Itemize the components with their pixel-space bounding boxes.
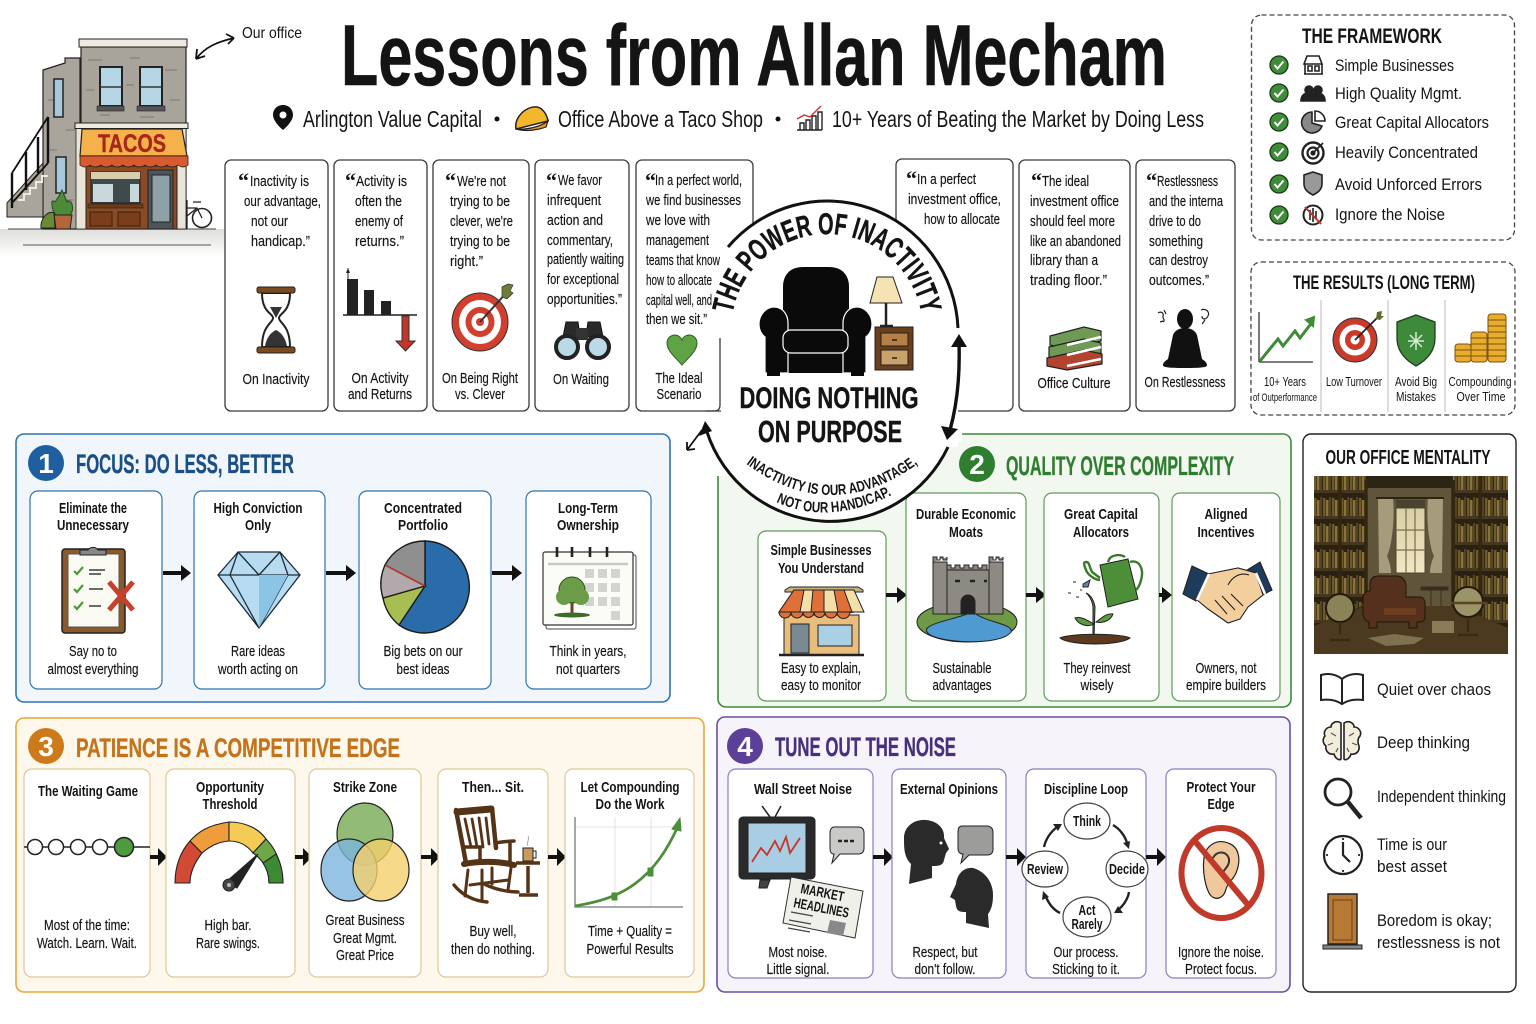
icon: coffee table with cup xyxy=(516,836,540,895)
quote card: the ideal scenario: Scenario xyxy=(656,387,702,403)
card: eliminate the unnecessary: almost everything xyxy=(48,662,138,678)
quote card: on activity and returns: often the xyxy=(355,194,402,210)
icon: hourglass xyxy=(257,287,295,353)
icon: watering can and sprout xyxy=(1060,555,1142,644)
card: let compounding do the work: Powerful Results xyxy=(586,942,674,958)
curved tagline: NOT OUR HANDICAP. xyxy=(776,488,891,512)
panel: the results xyxy=(1251,262,1515,415)
panel: the framework: Ignore the Noise xyxy=(1335,205,1445,224)
panel 2: quality over complexity xyxy=(718,434,1291,707)
card: let compounding do the work: Time + Quality = xyxy=(588,924,672,940)
arrow xyxy=(150,848,167,866)
card: external opinions: External Opinions xyxy=(900,781,998,798)
quote card: on waiting: On Waiting xyxy=(553,372,609,388)
card: high conviction only: Rare ideas xyxy=(231,644,285,660)
card: high conviction only: worth acting on xyxy=(217,662,298,678)
quote card: on inactivity: “ xyxy=(238,168,249,193)
card: aligned incentives: empire builders xyxy=(1186,678,1266,694)
arrow xyxy=(1159,587,1172,603)
quote card: how to allocate xyxy=(896,159,1013,411)
card: long-term ownership xyxy=(526,491,651,689)
card: wall street noise: Most noise. xyxy=(768,945,828,961)
card: external opinions xyxy=(892,769,1006,978)
quote card: on waiting xyxy=(535,160,629,411)
quote card: on waiting: action and xyxy=(547,213,603,229)
card: then sit: Then... Sit. xyxy=(462,779,524,796)
loop arrowheads xyxy=(699,334,967,440)
curved tagline: INACTIVITY IS OUR ADVANTAGE, xyxy=(746,456,918,496)
badge 4: 4 xyxy=(737,731,753,762)
card: opportunity threshold: High bar. xyxy=(204,918,252,934)
card: the waiting game xyxy=(24,769,150,977)
card: concentrated portfolio: Concentrated xyxy=(384,500,462,517)
panel: the results: Compounding xyxy=(1448,374,1512,389)
icon: no ear xyxy=(1182,828,1262,918)
badge 2 xyxy=(959,446,995,482)
panel: the framework: THE FRAMEWORK xyxy=(1302,25,1442,48)
card: opportunity threshold xyxy=(166,769,295,977)
card: eliminate the unnecessary: Say no to xyxy=(69,644,117,660)
quote card: on restlessness: can destroy xyxy=(1149,253,1209,269)
badge 4 xyxy=(727,728,763,764)
card: then sit: Buy well, xyxy=(470,924,516,940)
quote card: the ideal scenario: The Ideal xyxy=(656,371,702,387)
card: high conviction only xyxy=(194,491,325,689)
quote card: on being right: vs. Clever xyxy=(455,387,505,403)
panel: the framework: Avoid Unforced Errors xyxy=(1335,175,1482,194)
quote card: on restlessness: something xyxy=(1149,234,1203,250)
card: protect your edge: Protect Your xyxy=(1186,779,1256,796)
quote card: on being right: On Being Right xyxy=(442,371,518,387)
arrow xyxy=(326,565,356,581)
quote card: on activity and returns: returns.” xyxy=(355,234,404,250)
icon: binoculars xyxy=(556,322,609,358)
badge 1: 1 xyxy=(38,448,54,479)
subtitle row: Arlington Value Capital xyxy=(303,106,482,132)
card: the waiting game: The Waiting Game xyxy=(38,783,138,800)
panel: the results: 10+ Years xyxy=(1264,374,1306,389)
panel: the framework: Heavily Concentrated xyxy=(1335,143,1478,162)
icon: head silhouettes xyxy=(904,820,993,928)
panel: the framework: Simple Businesses xyxy=(1335,56,1454,75)
card: long-term ownership: Ownership xyxy=(557,517,619,534)
central badge: the power of inactivity: ON PURPOSE xyxy=(758,414,902,449)
icon: castle with moat xyxy=(917,557,1017,642)
framework icons xyxy=(1301,56,1325,224)
card: wall street noise: Little signal. xyxy=(766,962,830,978)
arrow xyxy=(1006,848,1026,866)
arrow xyxy=(873,848,893,866)
card: let compounding do the work xyxy=(565,769,694,977)
quote card: how to allocate: “ xyxy=(906,166,917,191)
quote card: on waiting: infrequent xyxy=(547,193,601,209)
quote card: on inactivity: our advantage, xyxy=(244,194,321,210)
card: discipline loop: Sticking to it. xyxy=(1052,962,1120,978)
card: great capital allocators xyxy=(1044,493,1159,701)
arrow xyxy=(295,848,312,866)
card: protect your edge xyxy=(1166,769,1276,978)
chart: gauge xyxy=(175,822,283,891)
title: Lessons from Allan Mecham xyxy=(341,8,1167,104)
panel 4: tune out the noise: TUNE OUT THE NOISE xyxy=(775,732,956,762)
card: long-term ownership: Long-Term xyxy=(558,500,618,517)
quote card: office culture: “ xyxy=(1031,168,1042,193)
quote card: office culture: trading floor.” xyxy=(1030,273,1107,289)
quote card: the ideal scenario: capital well, and xyxy=(646,293,712,309)
quote card: on inactivity: handicap.” xyxy=(251,234,310,250)
quote card: on being right: right.” xyxy=(450,254,483,270)
arrow xyxy=(421,848,440,866)
central badge: the power of inactivity xyxy=(686,200,967,523)
quote card: on restlessness: On Restlessness xyxy=(1144,375,1226,391)
card: opportunity threshold: Opportunity xyxy=(196,779,265,796)
card: durable economic moats: advantages xyxy=(932,678,992,694)
chart: discipline loop: Review xyxy=(1027,861,1063,878)
icon: newspaper xyxy=(783,877,863,938)
quote card: the ideal scenario xyxy=(636,160,753,411)
card: aligned incentives xyxy=(1172,493,1280,701)
quote card: on activity and returns xyxy=(334,160,427,411)
panel 4: tune out the noise xyxy=(717,717,1290,992)
card: eliminate the unnecessary xyxy=(30,491,162,689)
card: external opinions: Respect, but xyxy=(912,945,978,961)
card: durable economic moats: Durable Economic xyxy=(916,506,1016,523)
quote card: the ideal scenario: we love with xyxy=(645,213,710,229)
card: durable economic moats: Moats xyxy=(949,524,983,541)
chart: discipline loop xyxy=(1022,803,1148,937)
quote card: on restlessness: and the interna xyxy=(1149,194,1224,210)
card: external opinions: don't follow. xyxy=(914,962,976,978)
panel 3: patience is a competitive edge: PATIENCE IS A COMPETITIVE EDGE xyxy=(76,733,400,763)
card: high conviction only: Only xyxy=(245,517,272,534)
card: great capital allocators: Great Capital xyxy=(1064,506,1138,523)
badge 3 xyxy=(28,728,64,764)
card: concentrated portfolio xyxy=(359,491,491,689)
quote card: on waiting: opportunities.” xyxy=(547,292,622,308)
badge 3: 3 xyxy=(38,731,54,762)
quote card: on waiting: for exceptional xyxy=(547,272,619,288)
chart: venn diagram xyxy=(321,803,409,901)
quote card: on being right: “ xyxy=(445,168,456,193)
arrow xyxy=(1146,848,1166,866)
card: discipline loop: Discipline Loop xyxy=(1044,781,1128,798)
results: coins xyxy=(1455,314,1506,362)
card: the waiting game: Watch. Learn. Wait. xyxy=(37,936,137,952)
quote card: on restlessness xyxy=(1136,160,1235,411)
list: time is our best asset: Time is our xyxy=(1377,835,1447,854)
icon: stack of books xyxy=(1047,327,1102,370)
panel: the results: Low Turnover xyxy=(1326,374,1382,389)
list: boredom is okay xyxy=(1323,894,1500,952)
card: discipline loop xyxy=(1022,769,1148,978)
chart: discipline loop: Decide xyxy=(1109,861,1145,878)
icon: waiting timeline xyxy=(24,838,150,856)
card: then sit: then do nothing. xyxy=(451,942,535,958)
panel: the framework: High Quality Mgmt. xyxy=(1335,84,1462,103)
icon: rising chart xyxy=(797,106,822,130)
quote card: on activity and returns: Activity is xyxy=(356,174,407,190)
panel 1: focus, do less, better: FOCUS: DO LESS, BETTER xyxy=(76,449,294,479)
card: let compounding do the work: Do the Work xyxy=(596,796,665,813)
icon: speech bubble xyxy=(830,827,864,863)
quote card: the ideal scenario: In a perfect world, xyxy=(655,173,742,189)
chart: discipline loop: Act xyxy=(1078,902,1096,919)
subtitle row: 10+ Years of Beating the Market by Doing Less xyxy=(832,106,1204,132)
list: time is our best asset: best asset xyxy=(1377,857,1447,876)
results: shield xyxy=(1397,315,1435,366)
list: deep thinking: Deep thinking xyxy=(1377,733,1470,752)
panel: the framework: Great Capital Allocators xyxy=(1335,113,1489,132)
quote card: the ideal scenario: then we sit.” xyxy=(646,312,707,328)
card: long-term ownership: Think in years, xyxy=(550,644,626,660)
card: discipline loop: Our process. xyxy=(1054,945,1118,961)
icon: taco xyxy=(516,107,548,130)
panel: the results: Over Time xyxy=(1456,389,1506,404)
results: growth chart xyxy=(1259,312,1314,362)
quote card: on being right: trying to be xyxy=(450,194,510,210)
icon: handshake xyxy=(1183,562,1272,623)
quote card: office culture: The ideal xyxy=(1042,174,1089,190)
card: aligned incentives: Incentives xyxy=(1198,524,1254,541)
card: eliminate the unnecessary: Eliminate the xyxy=(59,500,127,517)
list: boredom is okay: restlessness is not xyxy=(1377,933,1500,952)
card: great capital allocators: Allocators xyxy=(1073,524,1129,541)
badge 1 xyxy=(28,445,64,481)
arrow xyxy=(163,565,191,581)
panel: the results: of Outperformance xyxy=(1253,392,1317,404)
quote card: office culture: library than a xyxy=(1030,253,1099,269)
quote card: on waiting: We favor xyxy=(558,173,602,189)
office label with arrow: Our office xyxy=(242,25,302,42)
panel 2: quality over complexity: QUALITY OVER COMPLEXITY xyxy=(1006,451,1234,481)
card: aligned incentives: Owners, not xyxy=(1196,661,1256,677)
list: independent thinking: Independent thinking xyxy=(1377,787,1506,806)
central badge: the power of inactivity: DOING NOTHING xyxy=(740,382,918,415)
quote card: on restlessness: outcomes.” xyxy=(1149,273,1209,289)
quote card: office culture: investment office xyxy=(1030,194,1119,210)
quote card: on restlessness: “ xyxy=(1146,168,1157,193)
office label with arrow xyxy=(196,25,302,59)
arrow xyxy=(492,565,522,581)
list: deep thinking xyxy=(1323,722,1470,760)
list: boredom is okay: Boredom is okay; xyxy=(1377,911,1492,930)
framework checks xyxy=(1270,56,1288,224)
arrow xyxy=(548,848,566,866)
quote card: on restlessness: Restlessness xyxy=(1157,174,1218,190)
quote card: on being right: trying to be xyxy=(450,234,510,250)
quote card: on activity and returns: enemy of xyxy=(355,214,404,230)
quote card: on restlessness: drive to do xyxy=(1149,214,1201,230)
quote card: the ideal scenario: teams that know xyxy=(646,253,720,269)
loop arrows around badge xyxy=(687,201,959,521)
icon: clipboard with X xyxy=(62,547,133,633)
card: opportunity threshold: Rare swings. xyxy=(196,936,260,952)
icon: location pin xyxy=(273,105,293,130)
quote card: on activity and returns: “ xyxy=(345,168,356,193)
card: simple businesses: Simple Businesses xyxy=(770,542,872,559)
quote card: how to allocate: In a perfect xyxy=(917,172,976,188)
list: independent thinking xyxy=(1325,779,1506,818)
chart: discipline loop: Think xyxy=(1073,813,1101,830)
card: long-term ownership: not quarters xyxy=(556,662,620,678)
icon: calendar with tree xyxy=(543,547,636,629)
quote card: on being right xyxy=(433,160,529,411)
illustration: taco shop building: TACOS xyxy=(98,130,166,158)
quote card: on being right: We're not xyxy=(457,174,506,190)
list: quiet over chaos xyxy=(1321,674,1491,704)
illustration: library xyxy=(1314,476,1508,654)
quote card: on activity and returns: On Activity xyxy=(352,371,409,387)
icon: speech bubble xyxy=(958,826,993,863)
card: simple businesses: easy to monitor xyxy=(781,678,861,694)
icon: armchair xyxy=(759,267,872,376)
card: strike zone: Great Mgmt. xyxy=(333,931,397,947)
card: strike zone: Great Price xyxy=(336,948,394,964)
icon: newspaper: MARKET xyxy=(799,880,846,904)
panel: the framework xyxy=(1252,15,1514,240)
icon: newspaper: HEADLINES xyxy=(792,894,850,921)
curved heading: THE POWER OF INACTIVITY xyxy=(712,212,942,310)
card: simple businesses xyxy=(758,531,886,701)
panel: the results: Mistakes xyxy=(1396,389,1436,404)
card: great capital allocators: They reinvest xyxy=(1064,661,1130,677)
card: wall street noise: Wall Street Noise xyxy=(754,781,852,798)
icon: tv with chart xyxy=(739,806,815,888)
quote card: the ideal scenario: how to allocate xyxy=(646,273,712,289)
illustration: taco shop building xyxy=(0,39,224,257)
card: wall street noise xyxy=(728,769,873,978)
card: strike zone: Great Business xyxy=(326,913,404,929)
quote card: on being right: clever, we're xyxy=(450,214,513,230)
card: durable economic moats: Sustainable xyxy=(932,661,992,677)
chart: discipline loop: Rarely xyxy=(1072,916,1103,933)
card: then sit xyxy=(438,769,548,977)
chart: portfolio pie xyxy=(381,541,469,633)
list: quiet over chaos: Quiet over chaos xyxy=(1377,680,1491,699)
subtitle row: Office Above a Taco Shop xyxy=(558,106,763,132)
arrow xyxy=(886,587,907,603)
quote card: how to allocate: investment office, xyxy=(908,192,1001,208)
quote card: on waiting: commentary, xyxy=(547,233,613,249)
card: great capital allocators: wisely xyxy=(1080,678,1114,694)
icon: diamond xyxy=(218,552,300,628)
icon: falling bars xyxy=(343,268,417,351)
icon: rocking chair xyxy=(454,808,518,902)
card: concentrated portfolio: Portfolio xyxy=(398,517,448,534)
quote card: on inactivity: On Inactivity xyxy=(242,372,310,388)
panel: the results: Avoid Big xyxy=(1395,374,1437,389)
chart: compounding curve xyxy=(575,817,683,907)
card: strike zone xyxy=(309,769,421,977)
card: simple businesses: You Understand xyxy=(778,560,864,577)
quote card: on inactivity xyxy=(225,160,328,411)
panel 1: focus, do less, better xyxy=(16,434,670,702)
quote card: on activity and returns: and Returns xyxy=(348,387,412,403)
icon: lamp and nightstand xyxy=(870,277,913,370)
icon: green heart xyxy=(667,335,697,365)
arrow xyxy=(1026,587,1046,603)
quote card: on waiting: patiently waiting xyxy=(547,252,624,268)
card: the waiting game: Most of the time: xyxy=(44,918,130,934)
icon: restless person xyxy=(1158,309,1209,368)
quote card: the ideal scenario: “ xyxy=(645,168,656,193)
card: protect your edge: Ignore the noise. xyxy=(1178,945,1264,961)
quote card: on inactivity: Inactivity is xyxy=(250,174,309,190)
card: high conviction only: High Conviction xyxy=(214,500,302,517)
icon: storefront xyxy=(779,587,864,655)
card: durable economic moats xyxy=(906,493,1026,701)
panel 3: patience is a competitive edge xyxy=(16,718,704,992)
list: time is our best asset xyxy=(1324,835,1447,876)
results: target xyxy=(1333,311,1384,362)
card: aligned incentives: Aligned xyxy=(1204,506,1248,523)
card: concentrated portfolio: best ideas xyxy=(396,662,450,678)
subtitle row xyxy=(273,105,1204,132)
panel: our office mentality xyxy=(1303,434,1516,992)
card: eliminate the unnecessary: Unnecessary xyxy=(57,517,129,534)
card: let compounding do the work: Let Compounding xyxy=(580,779,680,796)
card: protect your edge: Edge xyxy=(1208,796,1234,813)
quote card: office culture: like an abandoned xyxy=(1030,234,1121,250)
quote card: the ideal scenario: we find businesses xyxy=(645,193,741,209)
quote card: office culture: should feel more xyxy=(1030,214,1115,230)
card: simple businesses: Easy to explain, xyxy=(781,661,861,677)
quote card: how to allocate: how to allocate xyxy=(924,212,1000,228)
quote card: office culture: Office Culture xyxy=(1038,376,1110,392)
card: opportunity threshold: Threshold xyxy=(202,796,258,813)
quote card: on inactivity: not our xyxy=(251,214,288,230)
card: strike zone: Strike Zone xyxy=(333,779,397,796)
badge 2: 2 xyxy=(969,449,985,480)
quote card: the ideal scenario: management xyxy=(646,233,709,249)
quote card: on waiting: “ xyxy=(546,168,557,193)
card: concentrated portfolio: Big bets on our xyxy=(384,644,463,660)
quote card: office culture xyxy=(1019,160,1130,411)
icon: target xyxy=(452,284,513,351)
card: protect your edge: Protect focus. xyxy=(1185,962,1257,978)
